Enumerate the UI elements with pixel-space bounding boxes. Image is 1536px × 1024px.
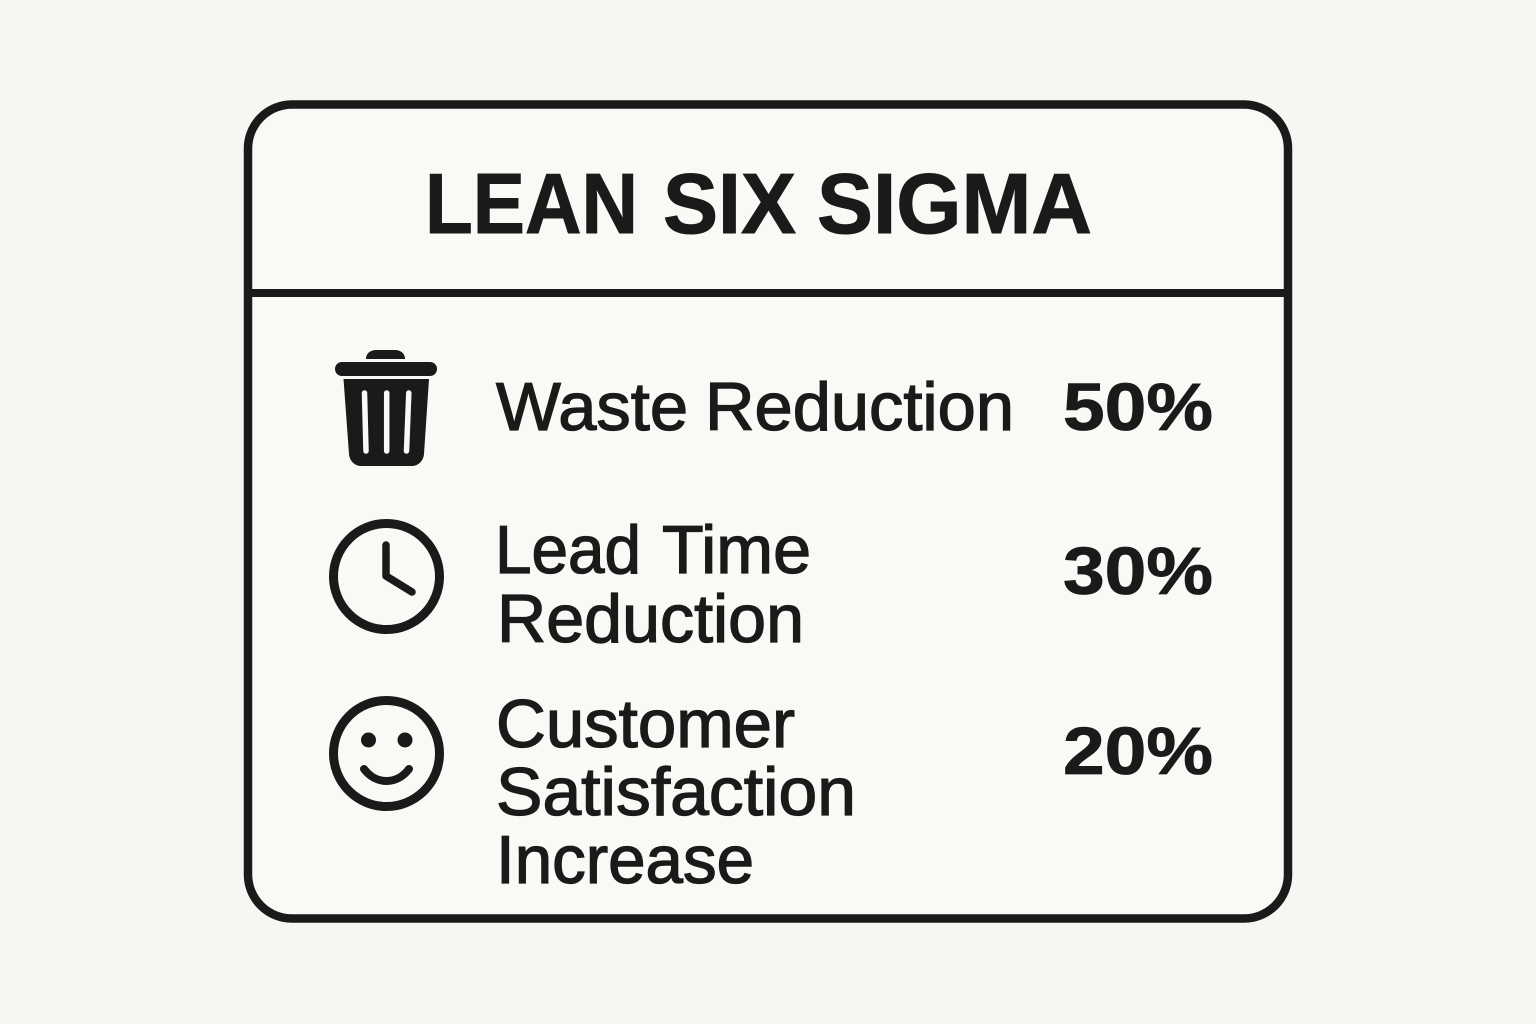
label: lead time reduction: Time	[662, 512, 811, 588]
row: lead time reduction	[334, 512, 1213, 657]
icon: trash can	[335, 350, 437, 466]
value: 30%: 30%	[1063, 534, 1213, 609]
panel: lean six sigma card	[248, 104, 1288, 918]
title: SIGMA	[817, 157, 1092, 252]
label: customer satisfaction increase	[496, 686, 856, 898]
label: lead time reduction: Lead	[495, 512, 641, 588]
value: 20%: 20%	[1063, 714, 1213, 789]
icon: smiley face	[334, 700, 440, 806]
label: waste reduction	[496, 369, 1014, 445]
label: lead time reduction	[495, 512, 811, 657]
value: 50%: 50%	[1063, 370, 1213, 445]
title: SIX	[663, 157, 796, 252]
label: customer satisfaction increase: Satisfaction	[496, 754, 856, 830]
label: waste reduction: Reduction	[705, 369, 1014, 445]
label: customer satisfaction increase: Customer	[496, 686, 795, 762]
label: customer satisfaction increase: Increase	[496, 822, 754, 898]
row: customer satisfaction increase	[334, 686, 1213, 898]
label: waste reduction: Waste	[496, 369, 688, 445]
title: LEAN	[425, 157, 638, 252]
icon: clock	[334, 524, 440, 630]
label: lead time reduction: Reduction	[497, 581, 804, 657]
row: waste reduction	[335, 350, 1213, 466]
title	[425, 157, 1092, 252]
